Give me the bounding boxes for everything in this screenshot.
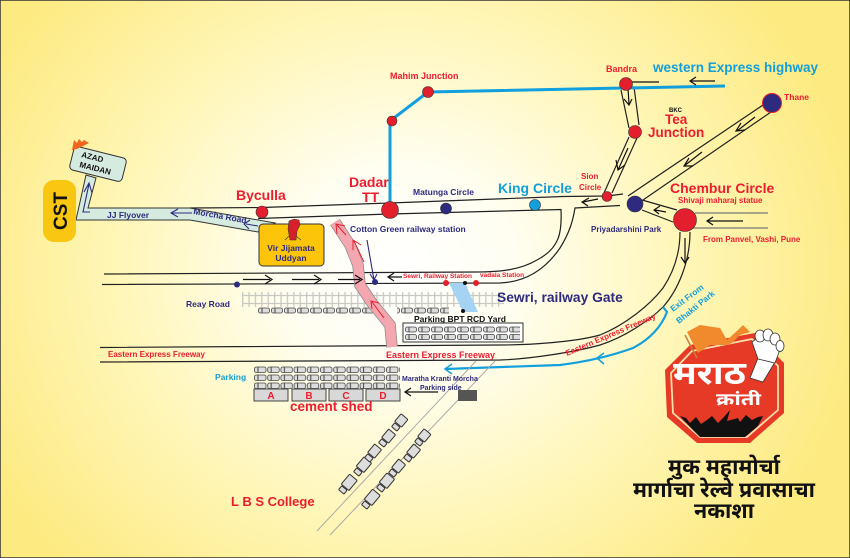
Vir Jijamata Uddyan: Vir Jijamata	[267, 243, 315, 253]
icon: flames	[72, 139, 89, 150]
map labels: Junction	[648, 125, 704, 140]
map labels: western Express highway	[652, 60, 819, 75]
map labels: Eastern Express Freeway	[564, 311, 658, 358]
cement shed bays: C	[342, 391, 350, 402]
map labels: Mahim Junction	[390, 71, 459, 81]
direction arrows on rail corridor	[243, 273, 402, 284]
map labels: Reay Road	[186, 299, 230, 309]
map labels: From Panvel, Vashi, Pune	[703, 235, 801, 244]
blue parking strip	[449, 283, 478, 312]
grey marker	[458, 390, 477, 401]
map labels: Priyadarshini Park	[591, 225, 662, 234]
map labels: Parking side	[420, 385, 462, 392]
map labels: Shivaji maharaj statue	[678, 196, 763, 205]
arrow: route to Azad Maidan	[83, 183, 92, 212]
diagonal parked vehicles	[337, 414, 431, 510]
eastern express freeway roads	[100, 232, 690, 362]
arrow: Morcha road	[171, 209, 192, 217]
logo sub wordmark: क्रांती	[716, 389, 762, 409]
Vir Jijamata Uddyan	[259, 219, 324, 266]
map labels: Thane	[784, 92, 809, 102]
road network	[102, 87, 771, 284]
logo crowd	[680, 410, 763, 437]
CST badge: CST	[51, 192, 72, 230]
cement shed bays: A	[267, 391, 275, 402]
western express highway and Mahim branch	[390, 77, 725, 209]
arrow: into flyover	[244, 220, 258, 229]
title in Marathi: मार्गाचा रेल्वे प्रवासाचा	[633, 477, 816, 502]
Azad Maidan sign	[69, 139, 127, 182]
map labels: Dadar	[349, 174, 389, 190]
logo flag	[687, 325, 750, 353]
parked cars above cement shed	[254, 366, 400, 390]
title in Marathi: नकाशा	[694, 499, 755, 523]
logo shield	[665, 333, 784, 443]
map labels: Maratha Kranti Morcha	[402, 376, 478, 383]
Azad Maidan sign: AZAD	[81, 150, 104, 164]
logo: Maratha Kranti	[665, 325, 784, 443]
map labels: Sewri, Railway Station	[403, 273, 472, 280]
logo wordmark: मराठ	[673, 355, 748, 391]
map labels: Bandra	[606, 64, 638, 74]
Cotton Green pointer	[367, 240, 377, 280]
map labels: Exit From	[668, 282, 706, 314]
title in Marathi	[633, 454, 816, 523]
Parking BPT RCD yard	[403, 323, 523, 342]
parked cars near track	[258, 307, 449, 314]
map labels: Bhakti Park	[674, 288, 717, 326]
logo fist	[750, 329, 784, 382]
icon: red fist	[285, 219, 301, 240]
cement shed bays	[254, 389, 400, 402]
map labels: Tea	[665, 112, 688, 127]
railway track	[242, 292, 504, 307]
Cotton Green route in pink	[335, 222, 392, 347]
map labels: vadala Station	[480, 272, 524, 279]
map labels: Cotton Green railway station	[350, 224, 466, 234]
map labels: Parking	[215, 372, 246, 382]
label: JJ Flyover: JJ Flyover	[107, 210, 150, 220]
map labels: Circle	[579, 183, 602, 192]
blue exit route	[445, 307, 667, 374]
map labels: Byculla	[236, 187, 286, 203]
map labels: Sion	[581, 172, 598, 181]
road direction arrows	[582, 88, 755, 263]
map labels: Parking BPT RCD Yard	[414, 314, 506, 324]
map labels: L B S College	[231, 494, 315, 509]
map labels: Sewri, railway Gate	[497, 290, 623, 305]
Vir Jijamata Uddyan: Uddyan	[275, 253, 307, 263]
map labels: cement shed	[290, 399, 373, 414]
cement shed bays: B	[305, 391, 313, 402]
map labels: King Circle	[498, 180, 572, 196]
station markers	[234, 78, 782, 313]
map labels: Eastern Express Freeway	[386, 350, 495, 360]
Azad Maidan sign: MAIDAN	[79, 160, 112, 177]
map labels: TT	[362, 189, 380, 205]
map labels: Eastern Express Freeway	[108, 350, 205, 359]
CST badge	[43, 180, 76, 242]
map labels: Matunga Circle	[413, 187, 474, 197]
map labels: Chembur Circle	[670, 180, 774, 196]
title in Marathi: मुक महामोर्चा	[668, 454, 781, 480]
label: Morcha Road: Morcha Road	[193, 206, 247, 225]
JJ flyover	[76, 175, 275, 232]
arrow to shed	[405, 388, 438, 396]
map labels: BKC	[669, 108, 683, 114]
map labels	[108, 60, 819, 509]
diagonal service road	[317, 361, 495, 535]
cement shed bays: D	[379, 391, 387, 402]
